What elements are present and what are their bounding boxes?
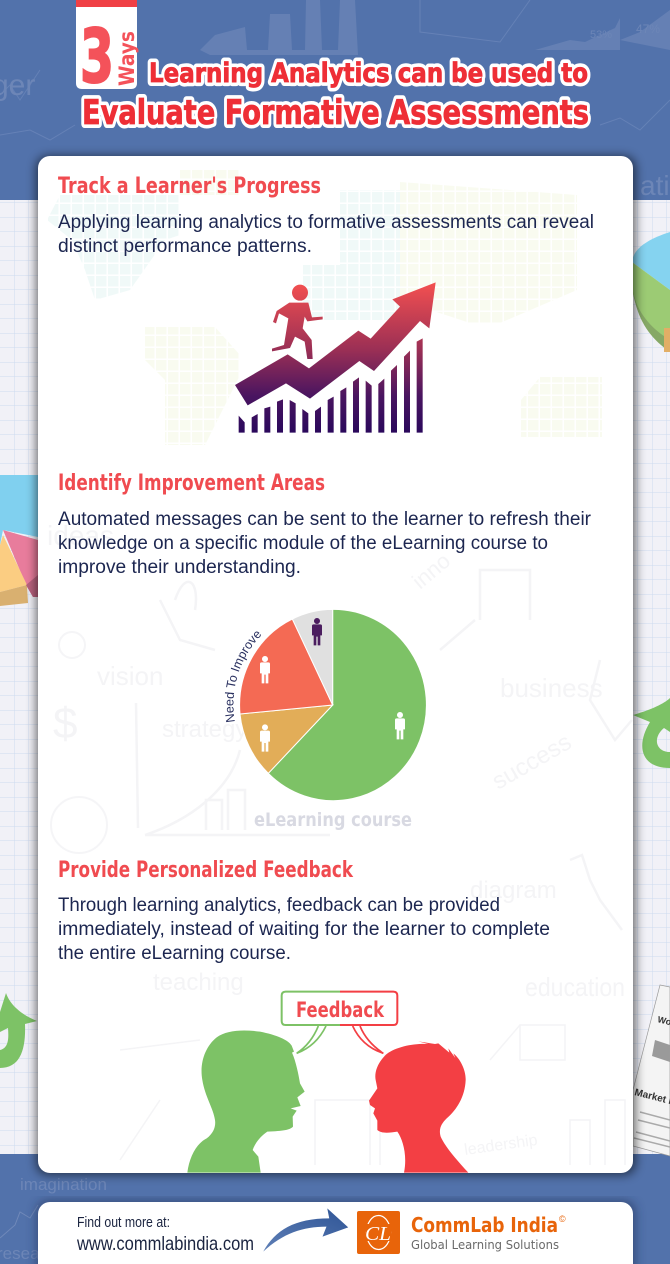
title: Learning Analytics can be used to [149,58,588,89]
text block: improvement areas [58,509,592,578]
text block: improvement areas: improve their understanding. [58,557,301,578]
panel: main white card [38,156,633,1173]
decoration: tilted market report page [633,985,670,1156]
faint doodles [47,520,632,1165]
faint world map [47,170,602,445]
faint doodles: diagram [470,877,557,904]
decoration: green curved arrow left [0,993,37,1068]
background: blue header band: ati [640,170,670,201]
icon: footer arrow [263,1208,348,1252]
faint doodles: inno [407,548,455,594]
title badge: 3 Ways: 3 [80,14,114,100]
decoration: 3D pie right [631,232,670,352]
decoration: green curved arrow right [633,698,670,768]
footer call to action [76,1215,254,1255]
icon: runner [272,285,323,359]
bubble label: Feedback [296,998,385,1022]
background: blue header band: 53% [590,29,612,41]
logo: CommLab India: CL [365,1223,391,1245]
curved pie label: Need To Improve [224,632,261,722]
background: graph paper [0,200,670,1154]
faint doodles: $ [53,699,77,748]
faint doodles: leadership [463,1132,539,1159]
text block: personalized feedback [58,895,550,964]
heading: personalized feedback: Provide Personalized Feedback [58,858,354,883]
title: Learning Analytics can be used to [149,58,588,89]
footer call to action: Find out more at: [77,1215,170,1231]
bubble tail: green [297,1026,326,1053]
background: blue header band [0,0,670,201]
background: blue header band: 47% [636,22,660,36]
icon: person in grey slice [312,618,322,645]
icon: rising arrow [235,282,436,405]
logo: CommLab India: © [559,1214,566,1224]
chart icon: runner on rising arrow [235,282,436,433]
logo: CommLab India: CommLab India [411,1213,558,1237]
decoration: 3D pie left [0,475,38,606]
faint doodles: teaching [153,969,244,996]
heading: improvement areas: Identify Improvement Areas [58,471,325,496]
text block: personalized feedback: the entire eLearning course. [58,943,291,964]
panel: footer card [36,1200,636,1264]
logo: CommLab India [357,1211,566,1254]
icon: person in orange slice [260,724,270,752]
faint doodles: vision [97,661,163,691]
main card shadow [36,156,636,1175]
title badge: 3 Ways: Ways [115,31,139,86]
text block: track progress [58,212,594,257]
icon: green head [187,1030,305,1173]
icon: bars [239,338,423,433]
illustration: two heads with feedback bubble [187,992,468,1173]
bubble box [282,992,397,1025]
text block: improvement areas: knowledge on a specific module of the eLearning course to [58,533,548,554]
icon: person in green slice [395,712,405,739]
faint doodles: business [500,673,603,703]
text block: improvement areas: Automated messages can be sent to the learner to refresh their [58,509,592,530]
faint doodles: education [525,972,625,1002]
faint doodles: success [488,728,576,795]
background: blue footer band [0,1154,670,1264]
text block: track progress: Applying learning analytics to formative assessments can reveal [58,212,594,233]
icon: red head [369,1041,468,1173]
title [82,58,589,133]
background: blue footer band: imagination [20,1175,107,1194]
logo: CommLab India: Global Learning Solutions [411,1238,559,1252]
faint doodles: ideas [47,520,114,551]
text block: personalized feedback: Through learning analytics, feedback can be provided [58,895,500,916]
heading: track progress: Track a Learner's Progress [58,174,321,199]
pie chart: eLearning course [240,609,426,801]
faint doodles: strategy [162,716,247,743]
bubble tail: red [353,1026,383,1053]
footer call to action: www.commlabindia.com [76,1233,254,1255]
pie caption: eLearning course [254,809,412,831]
text block: personalized feedback: immediately, instead of waiting for the learner to complete [58,919,550,940]
text block: track progress: distinct performance patterns. [58,236,312,257]
icon: person in red slice [260,656,270,683]
